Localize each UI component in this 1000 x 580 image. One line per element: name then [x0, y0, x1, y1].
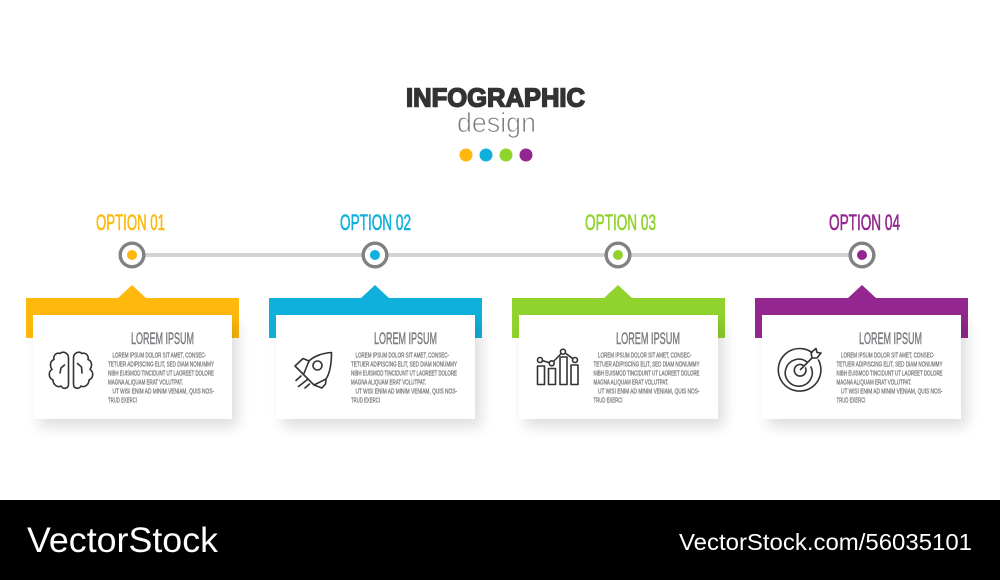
- icon: target: [778, 348, 821, 391]
- body text: MAGNA ALIQUAM ERAT VOLUTPAT.: [351, 378, 426, 386]
- panel: option 03: [512, 285, 725, 427]
- option 02 header: [340, 210, 411, 267]
- colour dots: [460, 148, 532, 162]
- option 01 header: [96, 210, 165, 267]
- panel: option 01: [26, 285, 239, 427]
- body text: TRUD EXERCI: [351, 396, 380, 404]
- panel: option 02: [269, 285, 482, 427]
- heading: LOREM IPSUM: [131, 329, 194, 348]
- body text: LOREM IPSUM DOLOR SIT AMET, CONSEC-: [112, 350, 206, 360]
- option 04 header: [829, 210, 900, 267]
- heading: LOREM IPSUM: [859, 329, 922, 348]
- body text: LOREM IPSUM DOLOR SIT AMET, CONSEC-: [356, 350, 449, 360]
- body text: UT WISI ENIM AD MINIM VENIAM, QUIS NOS-: [356, 386, 457, 396]
- body text: [351, 350, 457, 404]
- body text: [836, 350, 943, 404]
- icon: bar chart: [538, 349, 578, 384]
- body text: TRUD EXERCI: [108, 396, 137, 404]
- body text: NIBH EUISMOD TINCIDUNT UT LAOREET DOLORE: [108, 368, 214, 378]
- body text: MAGNA ALIQUAM ERAT VOLUTPAT.: [594, 378, 668, 386]
- heading: infographic: INFOGRAPHIC: [406, 82, 585, 112]
- icon: rocket: [295, 352, 332, 388]
- body text: MAGNA ALIQUAM ERAT VOLUTPAT.: [108, 378, 183, 386]
- subheading: design: design: [457, 107, 536, 138]
- option 04 header: OPTION 04: [829, 210, 900, 235]
- option 03 header: [585, 210, 656, 267]
- body text: [594, 350, 700, 404]
- footer band: [0, 500, 1000, 580]
- body text: MAGNA ALIQUAM ERAT VOLUTPAT.: [836, 378, 912, 386]
- image url: VectorStock.com/56035101: [679, 529, 972, 555]
- panel: option 04: [755, 285, 968, 427]
- heading: LOREM IPSUM: [374, 329, 437, 348]
- body text: UT WISI ENIM AD MINIM VENIAM, QUIS NOS-: [112, 386, 214, 396]
- body text: [108, 350, 214, 404]
- body text: TETUER ADIPISCING ELIT, SED DIAM NONUMMY: [351, 360, 457, 368]
- body text: TETUER ADIPISCING ELIT, SED DIAM NONUMMY: [594, 360, 700, 368]
- title: [406, 82, 585, 162]
- option 02 header: OPTION 02: [340, 210, 411, 235]
- heading: LOREM IPSUM: [616, 329, 680, 348]
- body text: TETUER ADIPISCING ELIT, SED DIAM NONUMMY: [108, 360, 214, 368]
- timeline connector: [132, 253, 862, 257]
- body text: UT WISI ENIM AD MINIM VENIAM, QUIS NOS-: [598, 386, 700, 396]
- body text: UT WISI ENIM AD MINIM VENIAM, QUIS NOS-: [841, 386, 943, 396]
- body text: NIBH EUISMOD TINCIDUNT UT LAOREET DOLORE: [351, 368, 457, 378]
- icon: brain: [49, 352, 93, 388]
- body text: LOREM IPSUM DOLOR SIT AMET, CONSEC-: [841, 350, 935, 360]
- option 03 header: OPTION 03: [585, 210, 656, 235]
- option 01 header: OPTION 01: [96, 210, 165, 235]
- body text: TRUD EXERCI: [836, 396, 866, 404]
- brand wordmark: VectorStock: [27, 521, 219, 560]
- body text: NIBH EUISMOD TINCIDUNT UT LAOREET DOLORE: [594, 368, 700, 378]
- body text: LOREM IPSUM DOLOR SIT AMET, CONSEC-: [598, 350, 692, 360]
- body text: TRUD EXERCI: [594, 396, 622, 404]
